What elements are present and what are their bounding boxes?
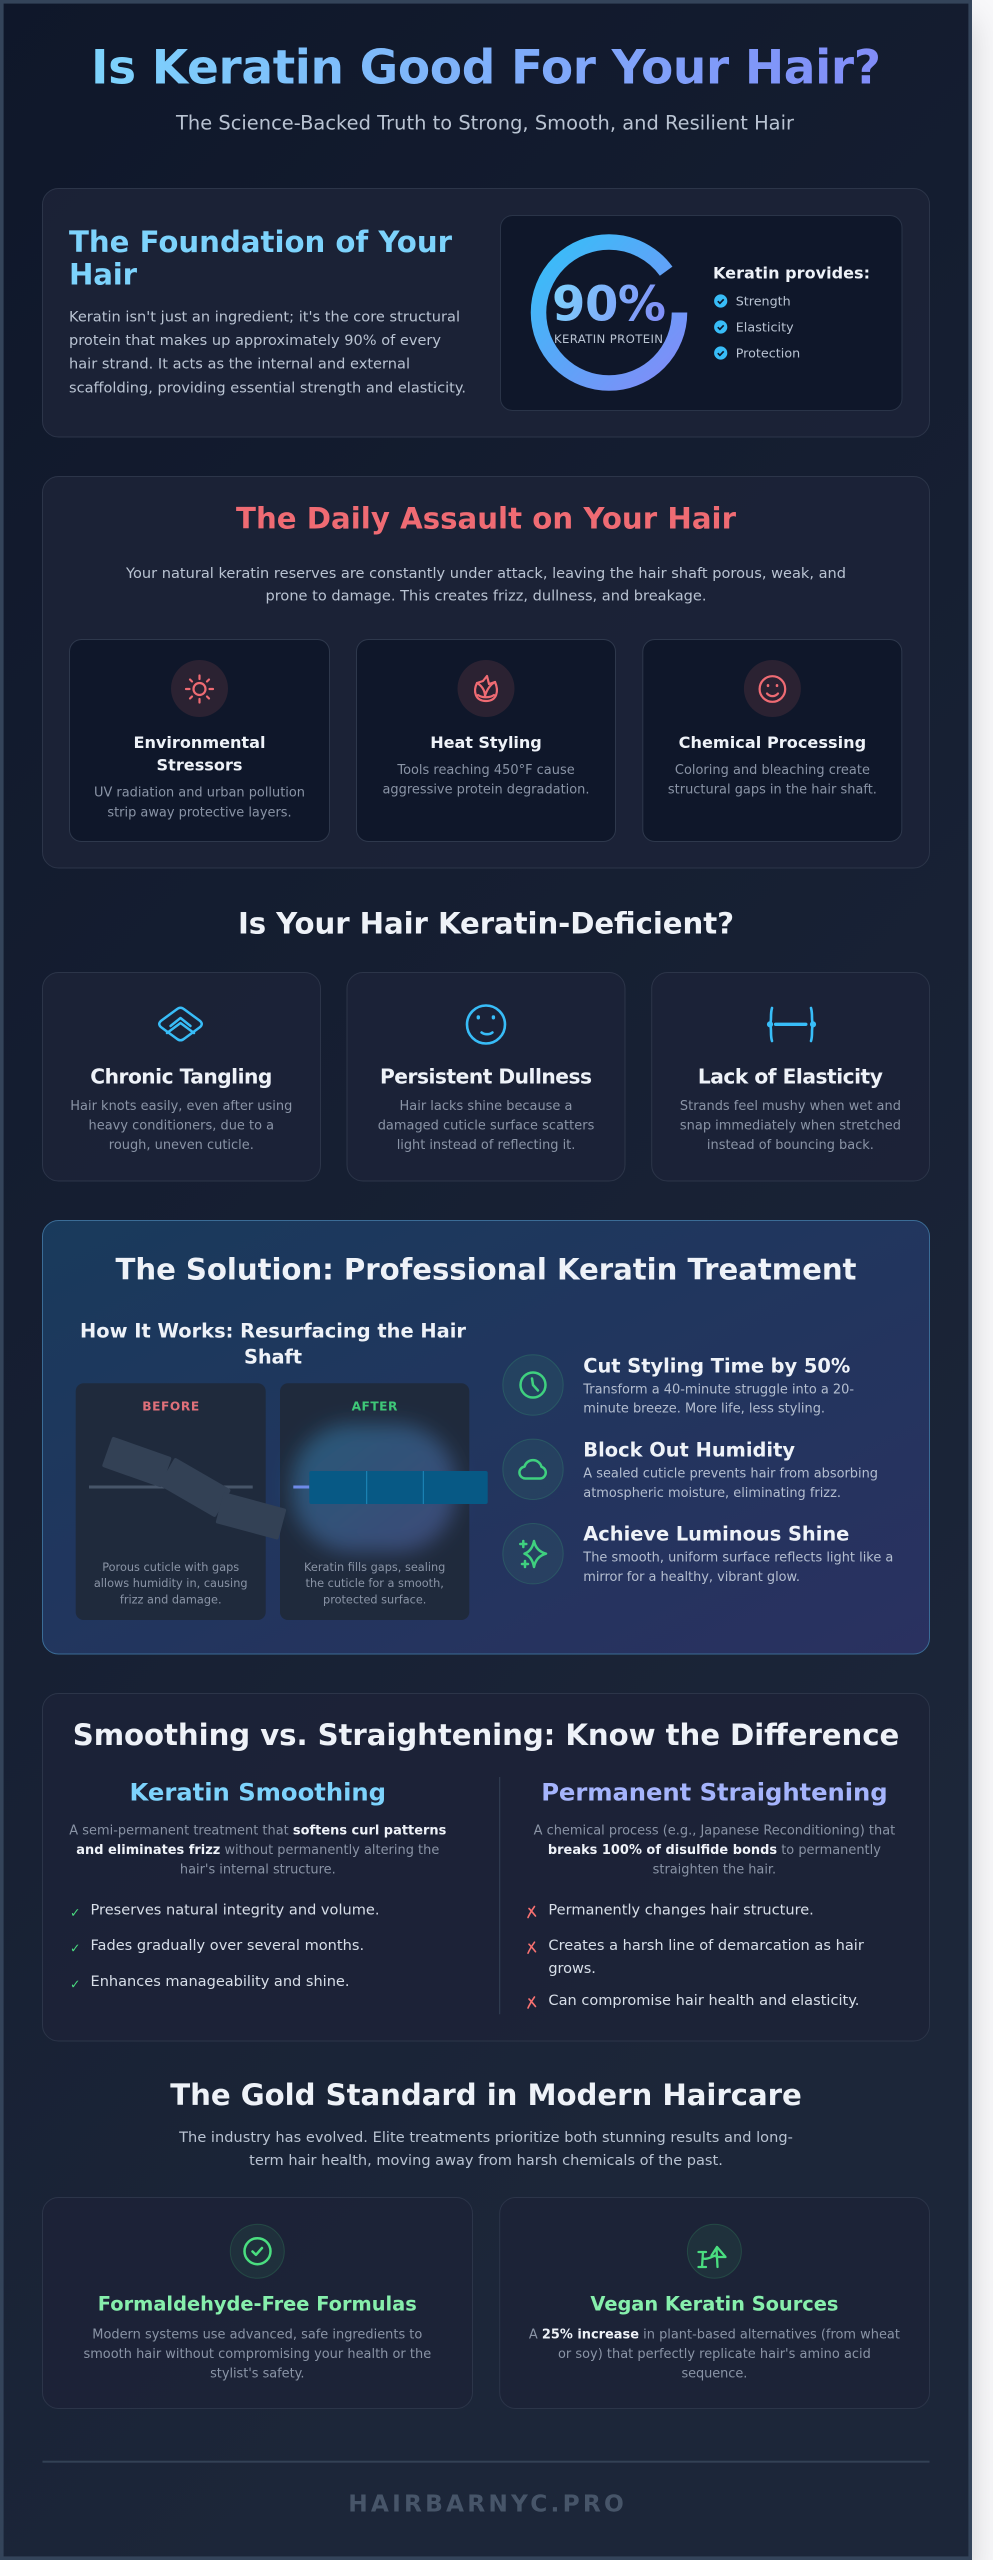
text block: The industry has evolved. Elite treatments prioritize both stunning results and long- — [178, 2129, 793, 2146]
heading: The Solution: Professional Keratin Treatment — [116, 1252, 857, 1286]
heading: The Gold Standard in Modern Haircare — [170, 2078, 802, 2112]
card text: Tools reaching 450°F cause — [396, 763, 575, 778]
list heading: Keratin provides: — [713, 264, 870, 282]
cons list: grows. — [548, 1960, 596, 1977]
card text: Coloring and bleaching create — [675, 763, 870, 778]
card text: snap immediately when stretched — [680, 1118, 901, 1134]
column: keratin smoothing — [69, 1778, 447, 1992]
heading: The Daily Assault on Your Hair — [236, 501, 737, 535]
before: lifted cuticle scales — [89, 1436, 287, 1540]
card: chemical processing — [643, 640, 902, 842]
statistic: 90% — [552, 277, 666, 333]
card title: Vegan Keratin Sources — [590, 2293, 838, 2316]
caption: frizz and damage. — [120, 1593, 222, 1606]
cons list — [528, 1902, 864, 2009]
subtitle: The Science-Backed Truth to Strong, Smooth, and Resilient Hair — [175, 112, 794, 134]
card text: light instead of reflecting it. — [397, 1138, 575, 1153]
text block: Your natural keratin reserves are constantly under attack, leaving the hair shaft porous, weak, and — [125, 565, 846, 582]
benefit text: mirror for a healthy, vibrant glow. — [583, 1570, 800, 1585]
card text: or soy) that perfectly replicate hair's amino acid — [558, 2347, 871, 2362]
card text: structural gaps in the hair shaft. — [668, 782, 877, 797]
card title: Heat Styling — [430, 733, 542, 752]
column: permanent straightening — [528, 1778, 895, 2009]
text block: term hair health, moving away from harsh chemicals of the past. — [249, 2152, 723, 2169]
pros list: Preserves natural integrity and volume. — [90, 1902, 380, 1918]
column title: Permanent Straightening — [541, 1778, 888, 1807]
donut chart — [538, 242, 680, 383]
pros list: ✓ — [70, 1976, 80, 1992]
caption: allows humidity in, causing — [94, 1577, 248, 1590]
card text: Strands feel mushy when wet and — [680, 1099, 901, 1114]
card title: Environmental — [134, 733, 266, 752]
caption: Porous cuticle with gaps — [102, 1561, 239, 1574]
caption: Keratin fills gaps, sealing — [304, 1561, 445, 1574]
heading: Smoothing vs. Straightening: Know the Difference — [73, 1718, 899, 1752]
benefit text — [582, 1354, 854, 1417]
card: lack of elasticity — [652, 972, 930, 1181]
title: Is Keratin Good For Your Hair? — [91, 40, 881, 96]
text block: scaffolding, providing essential strength and elasticity. — [69, 379, 466, 396]
benefit text: Achieve Luminous Shine — [583, 1523, 849, 1546]
card title: Formaldehyde-Free Formulas — [98, 2293, 417, 2316]
benefit text: minute breeze. More life, less styling. — [583, 1402, 825, 1417]
benefit text: Transform a 40-minute struggle into a 20- — [582, 1382, 854, 1397]
benefit text: Cut Styling Time by 50% — [583, 1354, 850, 1377]
panel: the daily assault — [42, 476, 930, 868]
heading — [69, 225, 453, 292]
card text: smooth hair without compromising your health or the — [83, 2347, 431, 2362]
icon: check circle — [230, 2224, 284, 2278]
benefit text — [583, 1439, 878, 1501]
pros list: ✓ — [70, 1941, 80, 1956]
section: keratin deficiency — [42, 906, 930, 1181]
benefit: strength: Strength — [736, 294, 791, 308]
card text — [382, 763, 590, 797]
card text: instead of bouncing back. — [707, 1138, 874, 1153]
panel: foundation of your hair — [42, 188, 930, 437]
diagram: before — [76, 1383, 266, 1620]
panel: smoothing vs straightening — [42, 1694, 930, 2041]
benefit: shine — [503, 1523, 893, 1585]
benefit text: A sealed cuticle prevents hair from absorbing — [583, 1467, 878, 1482]
benefit text — [582, 1523, 893, 1585]
after: sealed cuticle — [293, 1471, 488, 1504]
benefit text: atmospheric moisture, eliminating frizz. — [583, 1486, 841, 1501]
card text — [680, 1099, 901, 1153]
pros list: Enhances manageability and shine. — [90, 1973, 350, 1990]
column text: breaks 100% of disulfide bonds to permanently — [548, 1843, 881, 1858]
benefit text: The smooth, uniform surface reflects light like a — [582, 1551, 893, 1566]
card text: Hair knots easily, even after using — [70, 1099, 292, 1114]
benefit: protection: Protection — [736, 346, 800, 360]
text block — [69, 308, 466, 396]
card title: Chronic Tangling — [90, 1064, 272, 1088]
card text — [529, 2327, 900, 2381]
card: vegan keratin — [500, 2198, 930, 2408]
diagram: after — [280, 1383, 469, 1620]
cons list: Can compromise hair health and elasticity. — [548, 1992, 859, 2009]
icon: face — [744, 660, 801, 717]
card: formaldehyde-free — [42, 2198, 472, 2408]
icon: flame — [458, 660, 514, 717]
caption: protected surface. — [323, 1593, 426, 1606]
card text: sequence. — [681, 2366, 747, 2381]
card text: strip away protective layers. — [107, 805, 292, 820]
label: BEFORE — [142, 1400, 199, 1414]
benefit: elasticity: Elasticity — [736, 320, 794, 334]
text block: Keratin isn't just an ingredient; it's the core structural — [69, 308, 460, 326]
column text: hair's internal structure. — [180, 1862, 336, 1877]
icon: stretched strand — [768, 1008, 815, 1041]
icon: tangled diamond — [159, 1008, 202, 1040]
glow — [292, 1424, 456, 1552]
card: environmental stressors — [70, 640, 330, 842]
column text: straighten the hair. — [653, 1862, 776, 1877]
icon: dull face — [467, 1006, 505, 1044]
card: persistent dullness — [347, 972, 625, 1181]
card text — [668, 763, 877, 797]
card text: stylist's safety. — [210, 2366, 304, 2381]
heading: The Foundation of Your — [69, 225, 453, 259]
panel: the solution — [42, 1220, 930, 1654]
column text: and eliminates frizz without permanently altering the — [76, 1843, 439, 1858]
card title: Lack of Elasticity — [698, 1064, 883, 1088]
header — [91, 40, 881, 134]
text block — [125, 565, 846, 605]
icon: cloud — [503, 1439, 563, 1500]
card title: Persistent Dullness — [380, 1064, 592, 1088]
icon: sun — [171, 660, 228, 717]
heading: Hair — [69, 258, 138, 292]
brand: HAIRBARNYC.PRO — [348, 2490, 624, 2517]
benefit: humidity — [503, 1439, 878, 1501]
pros list: Fades gradually over several months. — [90, 1937, 364, 1954]
card text: A 25% increase in plant-based alternatives (from wheat — [529, 2327, 900, 2342]
subheading: How It Works: Resurfacing the Hair — [80, 1320, 466, 1343]
icon: sparkles — [503, 1524, 563, 1584]
subheading: Shaft — [244, 1345, 302, 1368]
column text — [69, 1824, 447, 1877]
card text: UV radiation and urban pollution — [94, 786, 305, 801]
cons list: Creates a harsh line of demarcation as hair — [548, 1937, 864, 1954]
card text: aggressive protein degradation. — [382, 782, 590, 797]
stat panel: 90% keratin protein — [500, 216, 902, 410]
card text — [94, 786, 305, 820]
column text — [534, 1824, 895, 1877]
column title: Keratin Smoothing — [130, 1778, 386, 1807]
card text: Modern systems use advanced, safe ingredients to — [92, 2327, 422, 2342]
caption: the cuticle for a smooth, — [306, 1577, 444, 1590]
section: gold standard — [42, 2078, 930, 2408]
card text: heavy conditioners, due to a — [88, 1118, 274, 1134]
card text — [70, 1099, 292, 1153]
card text — [378, 1099, 595, 1153]
card: chronic tangling — [42, 972, 320, 1181]
card title: Chemical Processing — [679, 733, 866, 752]
card text: rough, uneven cuticle. — [109, 1138, 254, 1153]
label: AFTER — [352, 1400, 398, 1414]
icon: clock — [503, 1355, 563, 1415]
card: heat styling — [356, 640, 616, 842]
stat caption: KERATIN PROTEIN — [554, 332, 663, 346]
text block: hair strand. It acts as the internal and external — [69, 356, 410, 373]
subheading — [80, 1320, 466, 1368]
card text: Hair lacks shine because a — [400, 1099, 572, 1114]
cons list: Permanently changes hair structure. — [548, 1902, 814, 1918]
pros list: ✓ — [70, 1905, 80, 1920]
card title: Stressors — [156, 756, 242, 775]
pros list — [70, 1902, 380, 1992]
column text: A chemical process (e.g., Japanese Reconditioning) that — [534, 1824, 895, 1839]
text block: protein that makes up approximately 90% of every — [69, 332, 441, 349]
card text: damaged cuticle surface scatters — [378, 1118, 595, 1134]
benefit text: Block Out Humidity — [583, 1439, 795, 1462]
benefit: styling time — [503, 1354, 854, 1417]
heading: Is Your Hair Keratin-Deficient? — [238, 906, 734, 940]
card title — [134, 733, 266, 775]
card text — [83, 2327, 431, 2381]
text block — [178, 2129, 793, 2169]
caption — [94, 1561, 248, 1606]
text block: prone to damage. This creates frizz, dullness, and breakage. — [266, 588, 706, 605]
column text: A semi-permanent treatment that softens curl patterns — [69, 1824, 447, 1839]
caption — [304, 1561, 445, 1606]
icon: plant — [687, 2224, 741, 2278]
